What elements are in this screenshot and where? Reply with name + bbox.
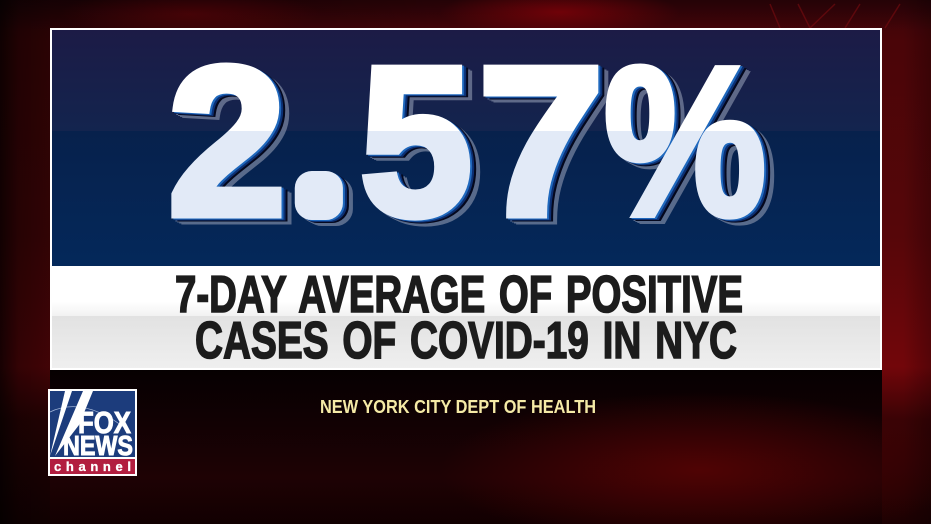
big number: 2.57%: . xyxy=(305,113,333,225)
caption line 1: 7-DAY AVERAGE OF POSITIVE xyxy=(175,266,743,324)
bottom dark strip xyxy=(50,369,931,524)
icon: Fox News Channel logo xyxy=(48,389,137,476)
big number: 2.57% xyxy=(168,22,766,260)
white caption band xyxy=(52,267,880,316)
icon: Fox News Channel logo: NEWS xyxy=(63,430,133,461)
source text: NEW YORK CITY DEPT OF HEALTH xyxy=(320,397,596,417)
icon: Fox News Channel logo: FOX xyxy=(78,405,131,440)
big number: 2.57%: 7 xyxy=(478,22,604,260)
big number: 2.57%: 2 xyxy=(168,22,286,260)
panel: statistic card xyxy=(50,22,882,370)
icon: Fox News Channel logo: channel xyxy=(54,459,131,474)
caption line 2: CASES OF COVID-19 IN NYC xyxy=(195,312,737,370)
big number: 2.57%: % xyxy=(604,22,766,260)
navy statistic background xyxy=(52,30,880,266)
big number: 2.57%: 5 xyxy=(360,22,472,260)
grey caption band xyxy=(52,316,880,368)
